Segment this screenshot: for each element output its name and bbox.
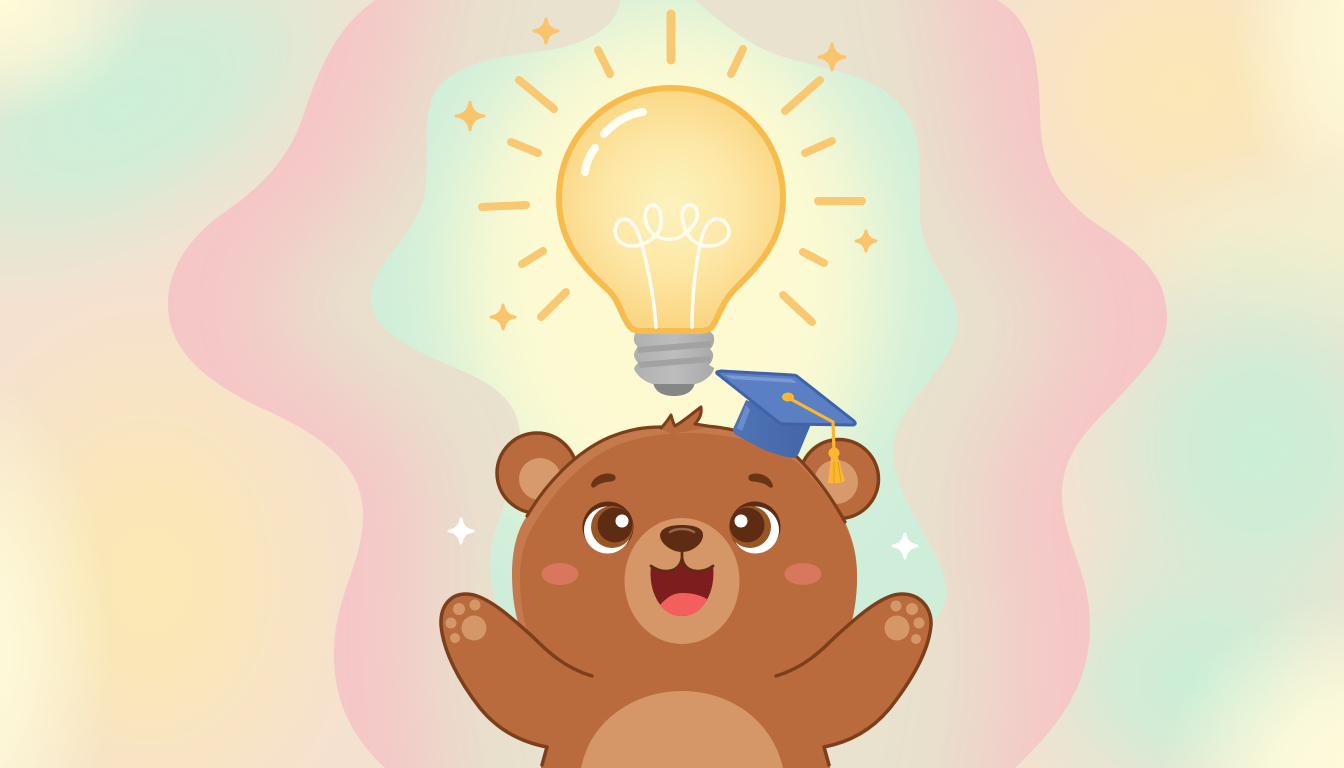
green blob (371, 0, 958, 650)
left ear (497, 433, 577, 513)
mouth (651, 552, 713, 616)
left arm (441, 594, 610, 768)
cap skull highlight (737, 405, 750, 431)
right eyebrow (748, 474, 773, 488)
screw base (634, 331, 714, 396)
body (541, 640, 830, 768)
tassel (828, 448, 845, 483)
pink blob (168, 0, 1167, 768)
tassel button (782, 392, 794, 402)
left arm outline (441, 594, 592, 765)
left eye (582, 502, 634, 554)
tassel cord (787, 397, 834, 452)
right paw pads (884, 600, 924, 644)
cap board highlight (724, 375, 797, 383)
filament (615, 205, 729, 327)
light bulb (559, 88, 783, 396)
right cheek (784, 563, 822, 585)
right arm (755, 594, 931, 768)
right arm outline (776, 594, 931, 765)
left eyebrow (591, 474, 616, 488)
head outline (527, 426, 845, 522)
muzzle (624, 518, 740, 644)
white sparkles (449, 519, 917, 558)
cap skull (733, 400, 811, 458)
graduation cap (717, 371, 855, 483)
left cheek (542, 563, 578, 585)
head (512, 407, 857, 736)
glass globe (559, 88, 783, 331)
nose (660, 525, 703, 552)
cap board (717, 371, 855, 425)
tuft (661, 407, 710, 434)
bear (441, 407, 931, 768)
sun rays (482, 14, 862, 322)
left paw pads (446, 600, 486, 643)
belly (581, 691, 783, 768)
gold sparkles (456, 19, 876, 329)
tuft outline (661, 407, 708, 428)
glass highlights (604, 112, 643, 134)
right ear (800, 440, 878, 518)
right eye (729, 502, 780, 554)
